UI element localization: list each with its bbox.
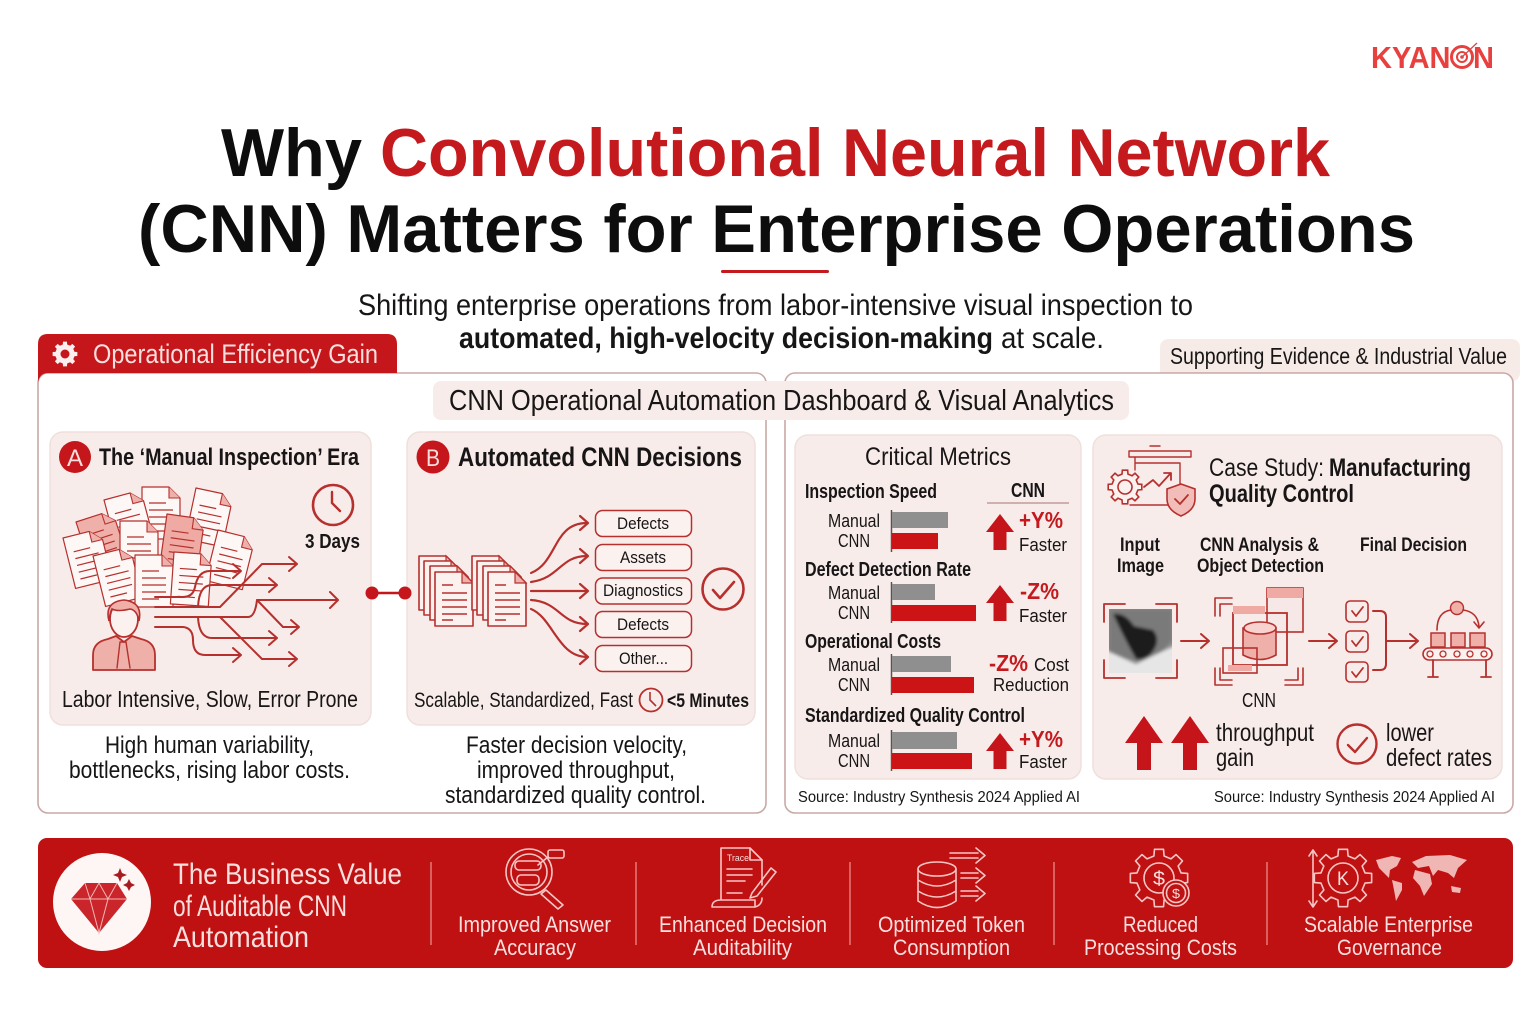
arrow: CNN to checks bbox=[1309, 634, 1337, 648]
badge A bbox=[59, 441, 91, 473]
metric: defect detection rate bbox=[805, 559, 1067, 626]
metric: standardized quality control bbox=[805, 705, 1067, 772]
item: scalable enterprise governance: K bbox=[1337, 869, 1349, 890]
metric: standardized quality control: Standardized Quality Control bbox=[805, 705, 1025, 727]
panel: supporting evidence bbox=[785, 339, 1520, 813]
item: improved answer accuracy bbox=[458, 849, 611, 960]
metric: operational costs: Manual bbox=[828, 655, 880, 675]
tab: operational efficiency gain bbox=[38, 334, 397, 382]
item: optimized token consumption bbox=[878, 848, 1025, 960]
text: automated summary: improved throughput, bbox=[477, 757, 675, 784]
column header: CNN: CNN bbox=[1011, 480, 1045, 502]
column labels bbox=[1117, 535, 1467, 577]
label: CNN: CNN bbox=[1242, 690, 1276, 712]
column labels: Input bbox=[1120, 535, 1161, 556]
caption B: Scalable, Standardized, Fast bbox=[414, 689, 633, 712]
metric: standardized quality control: Manual bbox=[828, 731, 880, 751]
icon: conveyor bbox=[1423, 602, 1492, 677]
metric: inspection speed: Faster bbox=[1019, 535, 1067, 555]
metric: inspection speed: CNN bbox=[838, 531, 870, 551]
source: case study: Source: Industry Synthesis 2024 Applied AI bbox=[1214, 789, 1495, 806]
text: manual summary: bottlenecks, rising labor costs. bbox=[69, 757, 350, 784]
icon: check list bbox=[1346, 601, 1368, 682]
output categories bbox=[596, 510, 692, 672]
heading B: Automated CNN Decisions bbox=[458, 442, 742, 472]
heading: case study: Quality Control bbox=[1209, 480, 1354, 508]
icon: world map bbox=[1376, 855, 1467, 901]
heading: business value: of Auditable CNN bbox=[173, 890, 347, 923]
text: manual summary: High human variability, bbox=[105, 732, 314, 759]
business value band bbox=[38, 838, 1513, 968]
column header: CNN bbox=[987, 480, 1069, 503]
badge B: B bbox=[426, 445, 440, 472]
metric: operational costs: Reduction bbox=[993, 675, 1069, 695]
dashboard title: CNN Operational Automation Dashboard & Visual Analytics bbox=[449, 385, 1114, 417]
heading: business value bbox=[173, 858, 402, 954]
metric: operational costs: Cost bbox=[1034, 655, 1069, 675]
metric: standardized quality control: Faster bbox=[1019, 752, 1067, 772]
icon: check circle bbox=[702, 568, 744, 610]
column labels: Object Detection bbox=[1197, 556, 1324, 577]
metric: defect detection rate: Manual bbox=[828, 583, 880, 603]
heading: case study: Manufacturing bbox=[1329, 454, 1471, 482]
tab: supporting evidence bbox=[1160, 339, 1520, 381]
icon: clock bbox=[313, 485, 353, 525]
item: improved answer accuracy: Accuracy bbox=[494, 935, 576, 960]
card B: automated CNN decisions bbox=[407, 432, 755, 725]
metric: defect detection rate: Faster bbox=[1019, 606, 1067, 626]
label: 3 days: 3 Days bbox=[305, 531, 360, 553]
caption B: <5 Minutes bbox=[667, 691, 749, 712]
input image bbox=[1104, 604, 1177, 680]
icon: ruby bbox=[53, 853, 151, 951]
icon: CNN object detection bbox=[1215, 588, 1303, 685]
title: (CNN) Matters for Enterprise Operations bbox=[138, 191, 1415, 267]
icon: document stacks bbox=[419, 556, 526, 626]
column labels: CNN Analysis & bbox=[1200, 535, 1319, 556]
heading: case study: Case Study: bbox=[1209, 454, 1324, 482]
metric: standardized quality control: +Y% bbox=[1019, 726, 1063, 752]
caption A: Labor Intensive, Slow, Error Prone bbox=[62, 686, 358, 712]
item: enhanced decision auditability bbox=[659, 848, 827, 960]
item: reduced processing costs: Reduced bbox=[1123, 912, 1198, 937]
title bbox=[138, 115, 1415, 273]
panel: operational efficiency bbox=[38, 334, 766, 813]
icon: worker bbox=[93, 600, 155, 670]
output categories: Defects bbox=[617, 514, 669, 533]
heading: business value: Automation bbox=[173, 921, 309, 954]
item: enhanced decision auditability: Enhanced Decision bbox=[659, 912, 827, 937]
sorted flow arrows bbox=[531, 516, 588, 664]
card: critical metrics bbox=[795, 435, 1081, 779]
heading A: The ‘Manual Inspection’ Era bbox=[99, 444, 360, 471]
item: reduced processing costs: $ bbox=[1153, 869, 1165, 890]
arrow: input to CNN bbox=[1181, 634, 1209, 648]
text: automated summary: standardized quality control. bbox=[445, 782, 706, 809]
heading: case study bbox=[1209, 454, 1471, 508]
title: Convolutional Neural Network bbox=[380, 115, 1330, 191]
output categories: Assets bbox=[620, 548, 666, 567]
heading: critical metrics: Critical Metrics bbox=[865, 443, 1011, 471]
output categories: Defects bbox=[617, 615, 669, 634]
card A: manual inspection era bbox=[50, 432, 371, 725]
metric: inspection speed bbox=[805, 481, 1067, 555]
subtitle: at scale. bbox=[1001, 322, 1104, 355]
subtitle: Shifting enterprise operations from labor-intensive visual inspection to bbox=[358, 289, 1193, 322]
item: optimized token consumption: Consumption bbox=[893, 935, 1010, 960]
source: metrics: Source: Industry Synthesis 2024 Applied AI bbox=[798, 789, 1080, 806]
chaotic flow arrows bbox=[155, 557, 338, 666]
badge B bbox=[416, 440, 450, 474]
item: scalable enterprise governance bbox=[1304, 849, 1473, 960]
throughput gain: throughput bbox=[1216, 719, 1314, 747]
metric: operational costs: CNN bbox=[838, 675, 870, 695]
connector between A and B bbox=[366, 586, 412, 600]
subtitle bbox=[358, 289, 1193, 355]
item: reduced processing costs bbox=[1084, 849, 1237, 960]
item: reduced processing costs: $ bbox=[1172, 886, 1181, 901]
logo: Kyanon: KYANON bbox=[1371, 40, 1494, 75]
metric: standardized quality control: CNN bbox=[838, 751, 870, 771]
throughput gain bbox=[1125, 716, 1314, 772]
item: enhanced decision auditability: Trace bbox=[727, 853, 749, 863]
metric: defect detection rate: CNN bbox=[838, 603, 870, 623]
badge A: A bbox=[67, 445, 83, 472]
metric: defect detection rate: Defect Detection Rate bbox=[805, 559, 971, 581]
metric: operational costs: -Z% bbox=[989, 650, 1028, 676]
metric: defect detection rate: -Z% bbox=[1020, 578, 1059, 604]
output categories: Other... bbox=[619, 649, 668, 668]
throughput gain: gain bbox=[1216, 744, 1254, 772]
metric: inspection speed: Manual bbox=[828, 511, 880, 531]
item: reduced processing costs: Processing Costs bbox=[1084, 935, 1237, 960]
metric: operational costs bbox=[805, 631, 1069, 695]
lower defect rates: lower bbox=[1386, 719, 1434, 747]
text: automated summary: Faster decision velocity, bbox=[466, 732, 687, 759]
output categories: Diagnostics bbox=[603, 581, 683, 600]
item: scalable enterprise governance: Scalable Enterprise bbox=[1304, 912, 1473, 937]
tab: operational efficiency gain: Operational Efficiency Gain bbox=[93, 339, 378, 369]
icon: case study dashboard bbox=[1108, 446, 1195, 516]
subtitle: automated, high-velocity decision-making bbox=[459, 322, 993, 355]
title: Why bbox=[221, 115, 362, 191]
item: scalable enterprise governance: Governance bbox=[1337, 935, 1442, 960]
card: case study bbox=[1093, 435, 1502, 779]
column labels: Image bbox=[1117, 556, 1164, 577]
column labels: Final Decision bbox=[1360, 535, 1467, 556]
metric: inspection speed: +Y% bbox=[1019, 507, 1063, 533]
arrow: checks to decision bbox=[1373, 611, 1418, 670]
heading: business value: The Business Value bbox=[173, 858, 402, 891]
metric: operational costs: Operational Costs bbox=[805, 631, 941, 653]
text: manual summary bbox=[69, 732, 350, 784]
item: improved answer accuracy: Improved Answer bbox=[458, 912, 611, 937]
text: automated summary bbox=[445, 732, 706, 809]
lower defect rates bbox=[1338, 719, 1492, 772]
item: optimized token consumption: Optimized Token bbox=[878, 912, 1025, 937]
lower defect rates: defect rates bbox=[1386, 744, 1492, 772]
icon: document pile bbox=[63, 487, 255, 607]
metric: inspection speed: Inspection Speed bbox=[805, 481, 937, 503]
item: enhanced decision auditability: Auditability bbox=[693, 935, 792, 960]
